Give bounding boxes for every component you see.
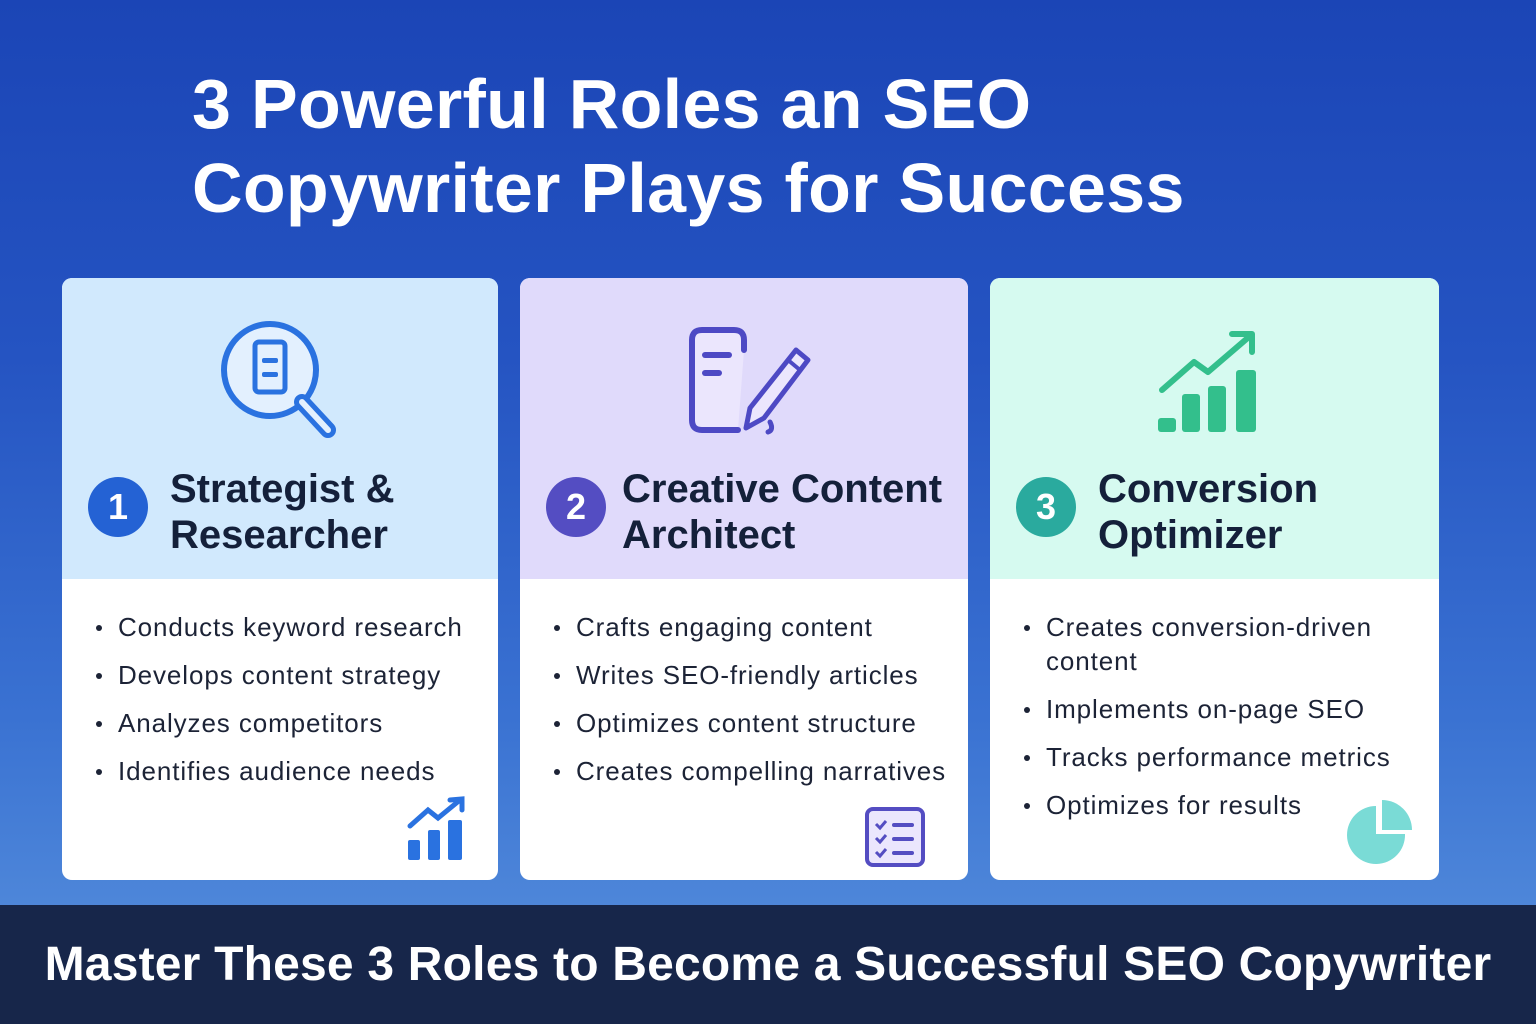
bullets: Optimizes content structure — [576, 708, 917, 738]
heading: Conversion — [1098, 467, 1318, 511]
title: 3 Powerful Roles an SEO — [192, 65, 1031, 143]
panel: creative — [520, 278, 968, 880]
heading: Strategist & — [170, 467, 394, 511]
bullets: Analyzes competitors — [118, 708, 383, 738]
heading — [1098, 467, 1318, 557]
panel: conversion — [990, 278, 1439, 880]
card header — [520, 278, 968, 579]
bullets — [1024, 612, 1391, 820]
bullets: Optimizes for results — [1046, 790, 1302, 820]
bullets: Writes SEO-friendly articles — [576, 660, 919, 690]
title — [192, 65, 1185, 227]
footer banner: Master These 3 Roles to Become a Successful SEO Copywriter — [45, 938, 1491, 991]
heading — [622, 467, 942, 557]
bullets: content — [1046, 646, 1138, 676]
bullets: Creates conversion-driven — [1046, 612, 1372, 642]
heading: Researcher — [170, 513, 388, 557]
number badge 2: 2 — [566, 486, 586, 527]
number badge 2 — [546, 477, 606, 537]
number badge 3: 3 — [1036, 486, 1056, 527]
bullets: Creates compelling narratives — [576, 756, 946, 786]
number badge 3 — [1016, 477, 1076, 537]
icon: document and pencil — [689, 327, 810, 434]
number badge 1: 1 — [108, 486, 128, 527]
icon: magnifier — [221, 321, 336, 438]
number badge 1 — [88, 477, 148, 537]
icon: list — [865, 807, 925, 867]
bullets: Develops content strategy — [118, 660, 441, 690]
card header — [990, 278, 1439, 579]
bullets: Tracks performance metrics — [1046, 742, 1391, 772]
bullets — [96, 612, 463, 786]
panel: strategist — [62, 278, 498, 880]
heading: Creative Content — [622, 467, 942, 511]
bullets: Crafts engaging content — [576, 612, 873, 642]
heading: Architect — [622, 513, 795, 557]
title: Copywriter Plays for Success — [192, 149, 1185, 227]
icon: small chart — [408, 796, 464, 860]
bullets: Conducts keyword research — [118, 612, 463, 642]
card header — [62, 278, 498, 579]
icon: growth chart — [1158, 331, 1256, 432]
bullets — [554, 612, 946, 786]
bullets: Implements on-page SEO — [1046, 694, 1365, 724]
footer banner — [0, 905, 1536, 1024]
heading — [170, 467, 394, 557]
icon: pie chart — [1347, 800, 1412, 864]
bullets: Identifies audience needs — [118, 756, 435, 786]
heading: Optimizer — [1098, 513, 1282, 557]
